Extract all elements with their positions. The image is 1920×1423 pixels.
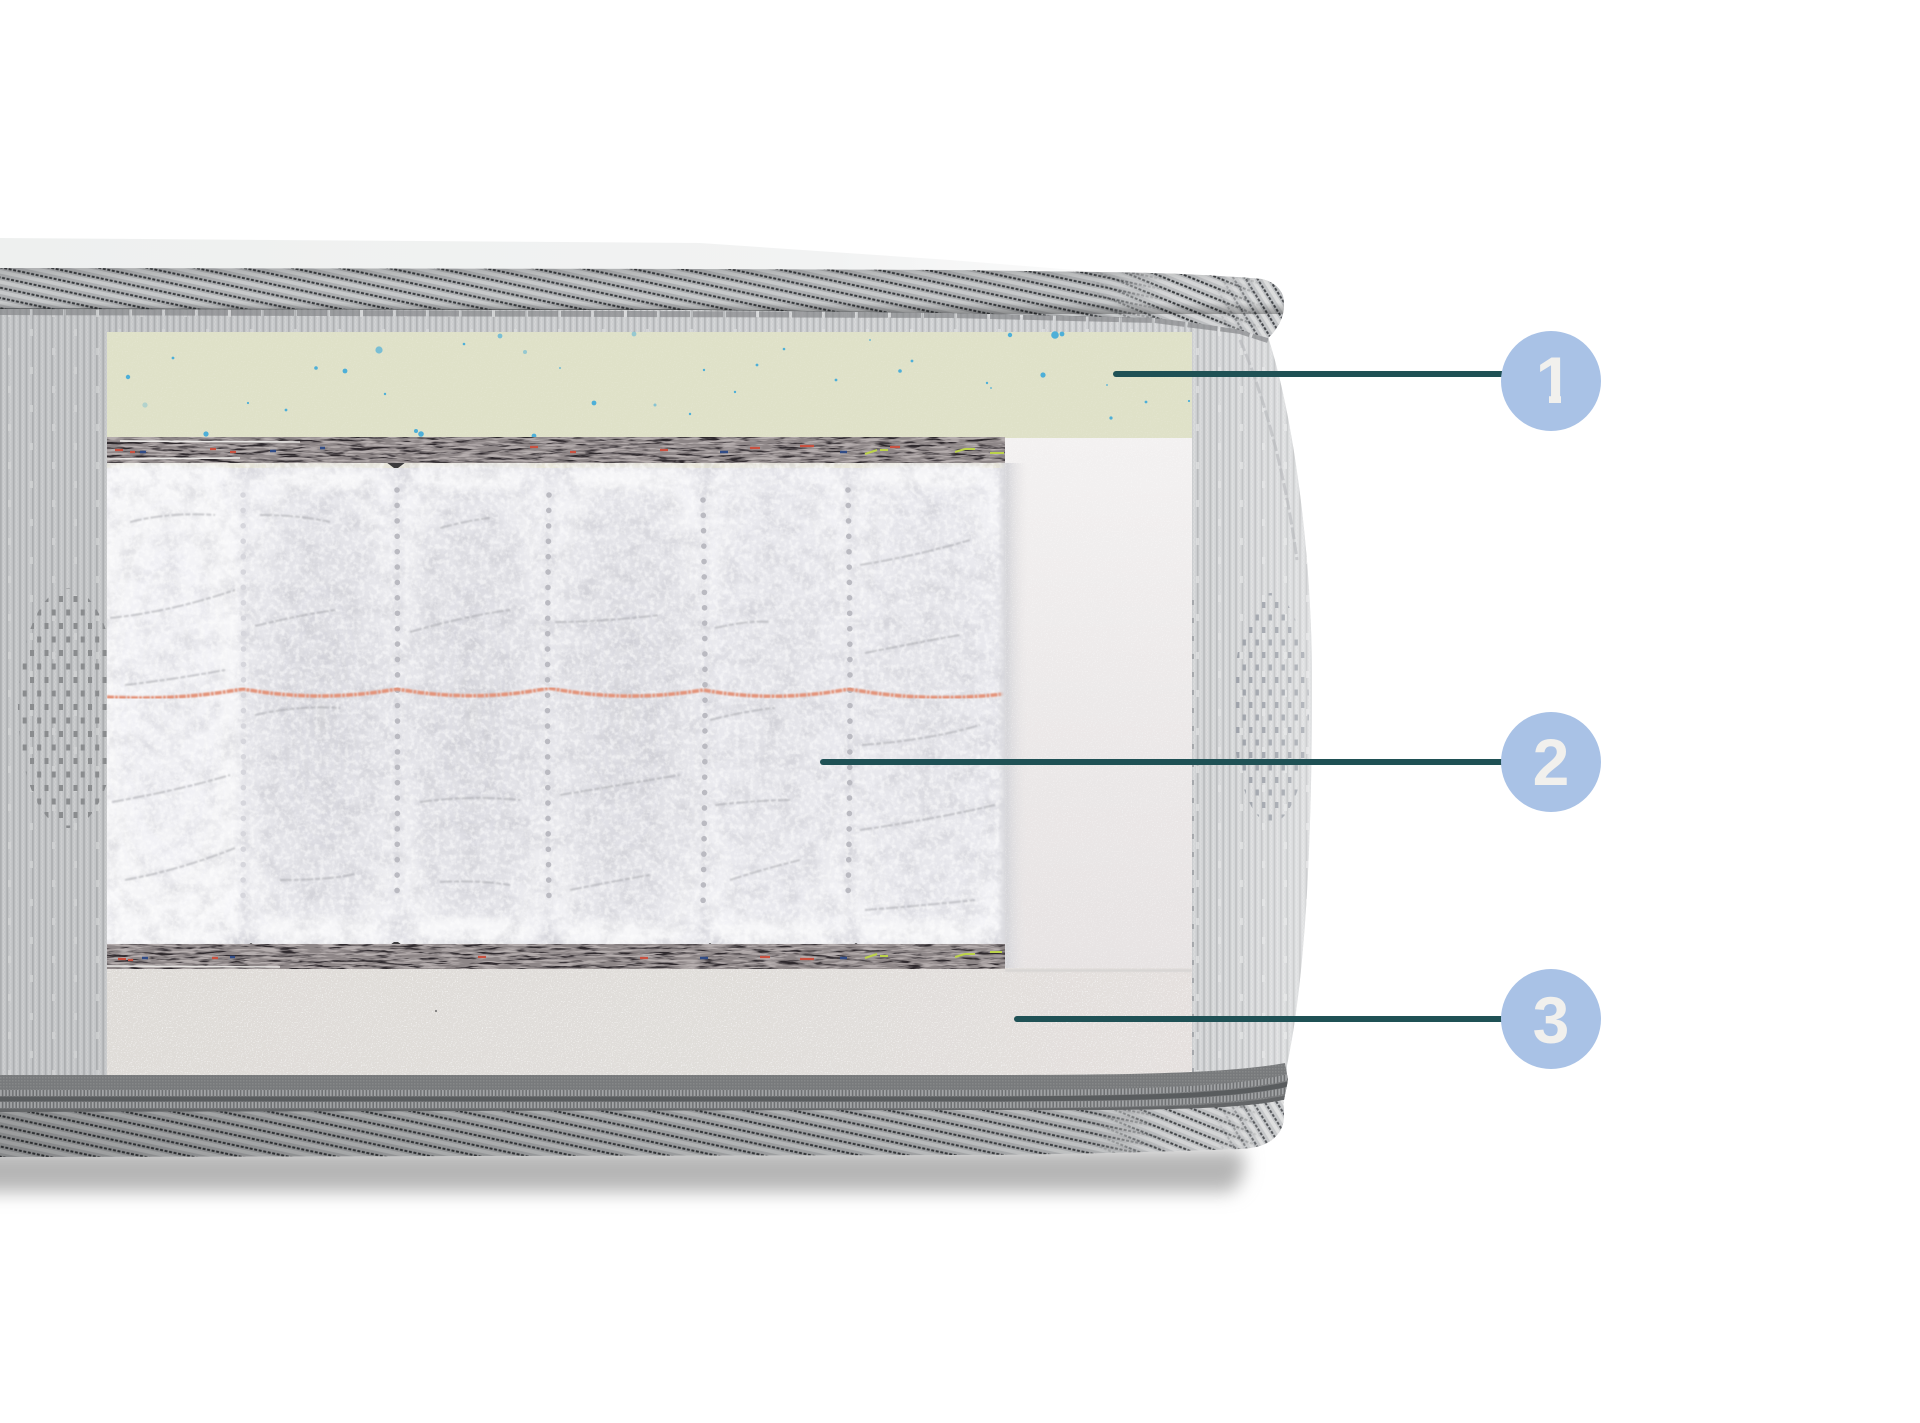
callout 2 (823, 712, 1601, 812)
pocket end puffs (274, 470, 960, 944)
bottom piping tape (0, 1100, 1284, 1157)
pocket 4 (553, 468, 701, 946)
layer 3: base foam (107, 968, 1192, 1075)
zipper band (0, 1063, 1288, 1112)
wrinkle texture (107, 461, 1005, 949)
orange tie line (107, 688, 1003, 698)
seam knots (243, 462, 864, 948)
badge circle 3 (1501, 969, 1601, 1069)
mattress cross-section infographic (0, 238, 1601, 1202)
right dimple panel (1233, 593, 1309, 823)
badge circle 2 (1501, 712, 1601, 812)
callout 3 (1017, 969, 1601, 1069)
badge circle 1 (1501, 331, 1601, 431)
pocket 3 (402, 465, 545, 945)
leader line 1 (1116, 371, 1510, 377)
layer 3 side foam rail (998, 438, 1192, 972)
blue gel specks (126, 331, 1190, 438)
callout 1 (1116, 331, 1601, 431)
badge number 3: 3 (1533, 983, 1569, 1057)
floor shadow (0, 1150, 1244, 1192)
felt pad lower (107, 944, 1005, 969)
leader line 2 (823, 759, 1510, 765)
pocket 2 (248, 468, 394, 946)
leader line 3 (1017, 1016, 1510, 1022)
fibre texture (107, 461, 1005, 949)
pocket 6 (855, 465, 1000, 945)
layer 1: gel memory foam (107, 331, 1192, 438)
left dimple panel (18, 588, 106, 828)
layer 2: pocket springs (95, 461, 1005, 949)
pocket 5 (708, 468, 846, 946)
perforated seams (243, 490, 850, 905)
top piping tape (0, 268, 1284, 338)
inner coil traces (110, 514, 995, 910)
pocket 1 (95, 465, 241, 945)
top surface of mattress (0, 238, 1250, 320)
badge number 2: 2 (1533, 725, 1569, 799)
side knit fabric (0, 300, 1320, 1090)
felt pad upper (107, 437, 1005, 463)
badge number 1: 1 (1536, 343, 1572, 417)
